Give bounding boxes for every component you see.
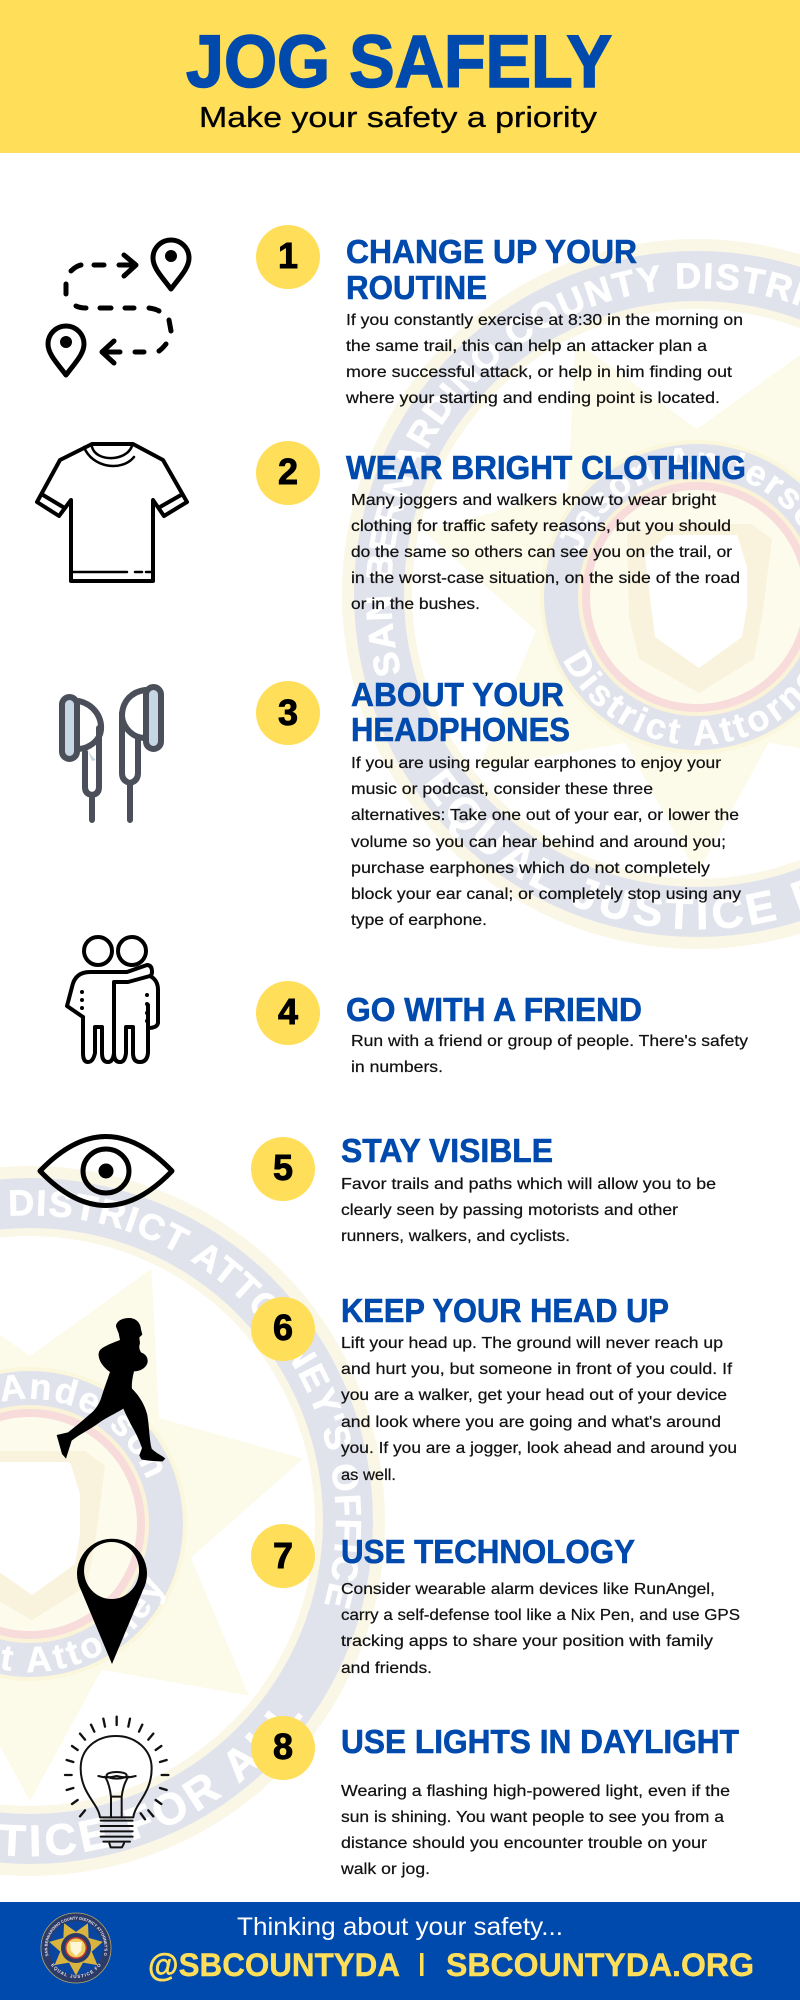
- footer website: SBCOUNTYDA.ORG: [446, 1947, 754, 1983]
- body text 7: carry a self-defense tool like a Nix Pen, and use GPS: [341, 1607, 740, 1624]
- tip 6: keep your head up: [57, 1292, 737, 1484]
- heading 5: STAY VISIBLE: [341, 1132, 553, 1169]
- heading 8: USE LIGHTS IN DAYLIGHT: [341, 1723, 739, 1760]
- watermark seal: top right: [342, 239, 800, 949]
- body text 7: tracking apps to share your position with family: [341, 1633, 713, 1650]
- body text 2: or in the bushes.: [351, 596, 480, 613]
- body text 8: sun is shining. You want people to see you from a: [341, 1809, 724, 1826]
- number badge 3: 3: [278, 692, 298, 733]
- number badge 2: [256, 441, 320, 505]
- body text 8: Wearing a flashing high-powered light, even if the: [341, 1783, 730, 1800]
- body text 6: [341, 1335, 737, 1484]
- body text 7: [341, 1581, 740, 1677]
- icon: two friends: [67, 937, 158, 1062]
- body text 6: and hurt you, but someone in front of you could. If: [341, 1361, 733, 1378]
- heading 1: CHANGE UP YOUR: [346, 233, 637, 270]
- tip 2: wear bright clothing: [37, 441, 746, 613]
- number badge 7: [251, 1524, 315, 1588]
- icon: eye: [40, 1136, 172, 1206]
- icon: light bulb: [65, 1717, 168, 1847]
- body text 2: Many joggers and walkers know to wear bright: [351, 492, 717, 509]
- heading 2: WEAR BRIGHT CLOTHING: [346, 449, 746, 486]
- tip 7: use technology: [77, 1524, 740, 1677]
- body text 8: walk or jog.: [340, 1861, 430, 1878]
- heading 6: KEEP YOUR HEAD UP: [341, 1292, 669, 1329]
- body text 1: more successful attack, or help in him finding out: [346, 364, 733, 381]
- body text 1: the same trail, this can help an attacker plan a: [346, 338, 707, 355]
- heading 1: [346, 233, 637, 306]
- body text 7: Consider wearable alarm devices like RunAngel,: [341, 1581, 715, 1598]
- body text 2: do the same so others can see you on the trail, or: [351, 544, 733, 561]
- number badge 5: [251, 1137, 315, 1201]
- body text 6: you. If you are a jogger, look ahead and around you: [341, 1440, 737, 1457]
- footer logo seal: SAN BERNARDINO COUNTY DISTRICT ATTORNEY'S OFFICE: [44, 1916, 108, 1956]
- heading 3: HEADPHONES: [351, 711, 570, 748]
- heading 7: USE TECHNOLOGY: [341, 1533, 635, 1570]
- heading 1: ROUTINE: [346, 269, 487, 306]
- icon: route between two map pins: [48, 240, 189, 375]
- body text 6: you are a walker, get your head out of your device: [341, 1387, 727, 1404]
- number badge 6: 6: [273, 1307, 293, 1348]
- icon: earphones: [62, 687, 161, 820]
- tip 5: stay visible: [40, 1132, 716, 1245]
- body text 8: distance should you encounter trouble on your: [341, 1835, 708, 1852]
- footer logo seal: [40, 1912, 112, 1984]
- number badge 1: [256, 225, 320, 289]
- number badge 7: 7: [273, 1535, 293, 1576]
- number badge 8: [251, 1716, 315, 1780]
- body text 2: clothing for traffic safety reasons, but you should: [351, 518, 731, 535]
- tip 1: change up your routine: [48, 225, 743, 407]
- icon: t-shirt: [37, 444, 187, 581]
- number badge 3: [256, 681, 320, 745]
- heading 4: GO WITH A FRIEND: [346, 991, 642, 1028]
- body text 3: music or podcast, consider these three: [351, 781, 653, 798]
- body text 5: Favor trails and paths which will allow you to be: [341, 1176, 716, 1193]
- heading 3: [351, 676, 570, 748]
- number badge 8: 8: [273, 1726, 293, 1767]
- body text 1: If you constantly exercise at 8:30 in the morning on: [346, 312, 743, 329]
- heading 3: ABOUT YOUR: [351, 676, 564, 713]
- icon: location pin: [77, 1539, 147, 1664]
- number badge 1: 1: [278, 235, 298, 276]
- watermark seal: bottom left: [0, 1166, 385, 1876]
- body text 1: [345, 312, 743, 407]
- body text 7: and friends.: [341, 1660, 432, 1677]
- body text 5: clearly seen by passing motorists and other: [341, 1202, 679, 1219]
- body text 3: volume so you can hear behind and around you;: [351, 834, 726, 851]
- number badge 4: 4: [278, 991, 298, 1032]
- footer tagline: Thinking about your safety...: [237, 1913, 563, 1941]
- number badge 6: [251, 1297, 315, 1361]
- body text 6: Lift your head up. The ground will never reach up: [341, 1335, 723, 1352]
- tip 4: go with a friend: [67, 937, 748, 1076]
- body text 2: [351, 492, 740, 613]
- body text 5: [341, 1176, 716, 1245]
- number badge 2: 2: [278, 451, 298, 492]
- header banner: [0, 0, 800, 153]
- tip 3: about your headphones: [62, 676, 741, 929]
- body text 3: type of earphone.: [351, 912, 487, 929]
- icon: jogger silhouette: [57, 1318, 165, 1461]
- body text 6: as well.: [341, 1467, 396, 1484]
- body text 6: and look where you are going and what's around: [341, 1414, 721, 1431]
- footer social handle: @SBCOUNTYDA: [148, 1947, 400, 1983]
- body text 1: where your starting and ending point is located.: [345, 390, 720, 407]
- body text 5: runners, walkers, and cyclists.: [341, 1228, 570, 1245]
- body text 2: in the worst-case situation, on the side of the road: [351, 570, 740, 587]
- body text 4: in numbers.: [351, 1059, 443, 1076]
- tip 8: use lights in daylight: [65, 1716, 739, 1878]
- body text 3: If you are using regular earphones to enjoy your: [351, 755, 722, 772]
- footer logo seal: EQUAL JUSTICE FOR ALL: [51, 1963, 100, 1978]
- body text 8: [340, 1783, 730, 1878]
- body text 4: Run with a friend or group of people. There's safety: [351, 1033, 748, 1050]
- title: JOG SAFELY: [186, 20, 612, 103]
- footer banner: [0, 1902, 800, 2000]
- body text 3: [351, 755, 741, 929]
- body text 3: block your ear canal; or completely stop using any: [351, 886, 741, 903]
- body text 3: alternatives: Take one out of your ear, or lower the: [351, 807, 739, 824]
- body text 3: purchase earphones which do not completely: [351, 860, 710, 877]
- number badge 4: [256, 981, 320, 1045]
- subtitle: Make your safety a priority: [199, 102, 598, 134]
- footer separator: [420, 1953, 424, 1976]
- body text 4: [351, 1033, 748, 1076]
- number badge 5: 5: [273, 1147, 293, 1188]
